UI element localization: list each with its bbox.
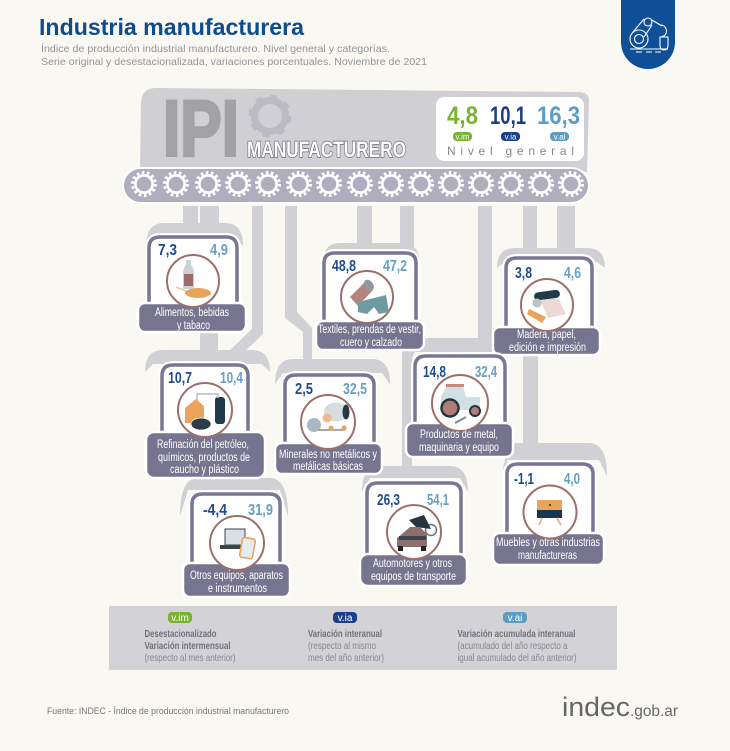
panel: textiles: cuero y calzado (340, 337, 402, 349)
panel: legend (109, 606, 617, 670)
panel: automotores: equipos de transporte (371, 571, 456, 583)
subtitle: Serie original y desestacionalizada, variaciones porcentuales. Noviembre de 2021 (41, 56, 427, 68)
panel: textiles: 48,8 (332, 258, 356, 275)
legend v.im: Variación intermensual (144, 640, 231, 652)
panel: minerales (275, 375, 382, 474)
panel: alimentos: 4,9 (210, 242, 228, 259)
panel: madera: 4,6 (564, 265, 581, 282)
legend v.im: Desestacionalizado (144, 628, 216, 640)
panel: otros equipos: Otros equipos, aparatos (190, 570, 283, 582)
panel: muebles: Muebles y otras industrias (496, 537, 600, 549)
panel: otros equipos: e instrumentos (208, 583, 267, 595)
indec logo: indec (562, 692, 630, 722)
legend v.ia: Variación interanual (308, 628, 382, 640)
panel: otros equipos: 31,9 (248, 502, 273, 519)
panel: otros equipos (183, 494, 290, 597)
conveyor belt (123, 168, 589, 203)
panel: nivel general (436, 97, 584, 161)
manufacturero label: MANUFACTURERO (247, 137, 406, 162)
value v.ai: 16,3 (537, 102, 580, 130)
panel: madera (493, 258, 600, 355)
subtitle (41, 42, 427, 68)
legend v.ai: v.ai (508, 613, 522, 624)
source note: Fuente: INDEC - Índice de producción industrial manufacturero (47, 706, 289, 716)
legend v.ai: Variación acumulada interanual (458, 628, 576, 640)
badge v.ia: v.ia (505, 132, 517, 142)
panel: madera: Madera, papel, (517, 329, 576, 341)
machine body (140, 88, 589, 172)
legend v.ai: (acumulado del año respecto a (458, 640, 568, 652)
IPI heading: IPI (163, 84, 239, 172)
panel: alimentos (138, 237, 246, 332)
pipes network (145, 206, 607, 516)
legend v.ia: mes del año anterior) (308, 652, 384, 664)
legend v.ai: igual acumulado del año anterior) (458, 652, 576, 664)
panel: textiles (316, 253, 424, 350)
legend v.ia: v.ia (338, 613, 353, 624)
badge v.ai (550, 132, 569, 142)
subtitle: Índice de producción industrial manufacturero. Nivel general y categorías. (41, 42, 390, 55)
title: Industria manufacturera (39, 14, 304, 40)
indec logo: .gob.ar (630, 703, 678, 720)
icon: chemicals and tyre (185, 394, 225, 430)
legend v.im (144, 612, 236, 664)
panel: minerales: Minerales no metálicos y (279, 449, 377, 461)
icon: tractor (441, 384, 480, 423)
panel: refinacion: químicos, productos de (158, 452, 250, 464)
panel: refinacion: Refinación del petróleo, (157, 439, 249, 451)
panel: refinacion: caucho y plástico (170, 464, 239, 476)
value v.ia: 10,1 (490, 102, 526, 130)
panel: metal: Productos de metal, (420, 429, 498, 441)
value v.im: 4,8 (447, 102, 478, 130)
panel: textiles: Textiles, prendas de vestir, (318, 324, 421, 336)
panel: refinacion: 10,4 (220, 370, 243, 387)
panel: muebles: -1,1 (514, 471, 534, 488)
legend v.ai (458, 612, 576, 664)
panel: otros equipos: -4,4 (203, 502, 227, 519)
icon: laptop and phone (220, 529, 256, 559)
icon: cabinet (537, 500, 562, 525)
badge v.im: v.im (455, 132, 470, 142)
panel: refinacion: 10,7 (168, 370, 192, 387)
panel: muebles: 4,0 (564, 471, 580, 488)
nivel general label: Nivel general (447, 144, 574, 158)
icon: concrete mixer (307, 402, 350, 432)
panel: automotores (360, 483, 467, 586)
panel: metal: 14,8 (423, 364, 446, 381)
panel: automotores: Automotores y otros (373, 558, 452, 570)
icon: gear (250, 96, 290, 136)
panel: automotores: 26,3 (377, 492, 400, 509)
badge v.ai: v.ai (554, 132, 566, 142)
panel: refinacion (146, 365, 265, 478)
panel: metal: maquinaria y equipo (419, 442, 499, 454)
panel: alimentos: 7,3 (158, 242, 177, 259)
icon: robot arm badge (621, 0, 675, 69)
panel: minerales: 2,5 (295, 381, 313, 398)
legend v.ia: (respecto al mismo (308, 640, 376, 652)
indec logo (562, 692, 678, 722)
panel: alimentos: y tabaco (177, 320, 210, 332)
icon: pickup and motorbike (397, 515, 436, 551)
icon: bottle and bread (176, 260, 211, 298)
panel: automotores: 54,1 (427, 492, 449, 509)
panel: muebles: manufactureras (518, 550, 577, 562)
panel: minerales: 32,5 (343, 381, 367, 398)
icon: paper rolls and wood (527, 289, 566, 323)
panel: minerales: metálicas básicas (293, 461, 363, 473)
panel: metal (406, 356, 513, 457)
legend v.ia (308, 612, 384, 664)
legend v.im: (respecto al mes anterior) (144, 652, 236, 664)
badge v.ia (501, 132, 520, 142)
panel: madera: edición e impresión (509, 342, 586, 354)
panel: madera: 3,8 (515, 265, 532, 282)
panel: textiles: 47,2 (383, 258, 407, 275)
panel: alimentos: Alimentos, bebidas (155, 307, 229, 319)
icon: fabric and shorts (350, 278, 389, 314)
panel: metal: 32,4 (475, 364, 497, 381)
legend v.im: v.im (171, 613, 189, 624)
panel: muebles (493, 464, 604, 565)
